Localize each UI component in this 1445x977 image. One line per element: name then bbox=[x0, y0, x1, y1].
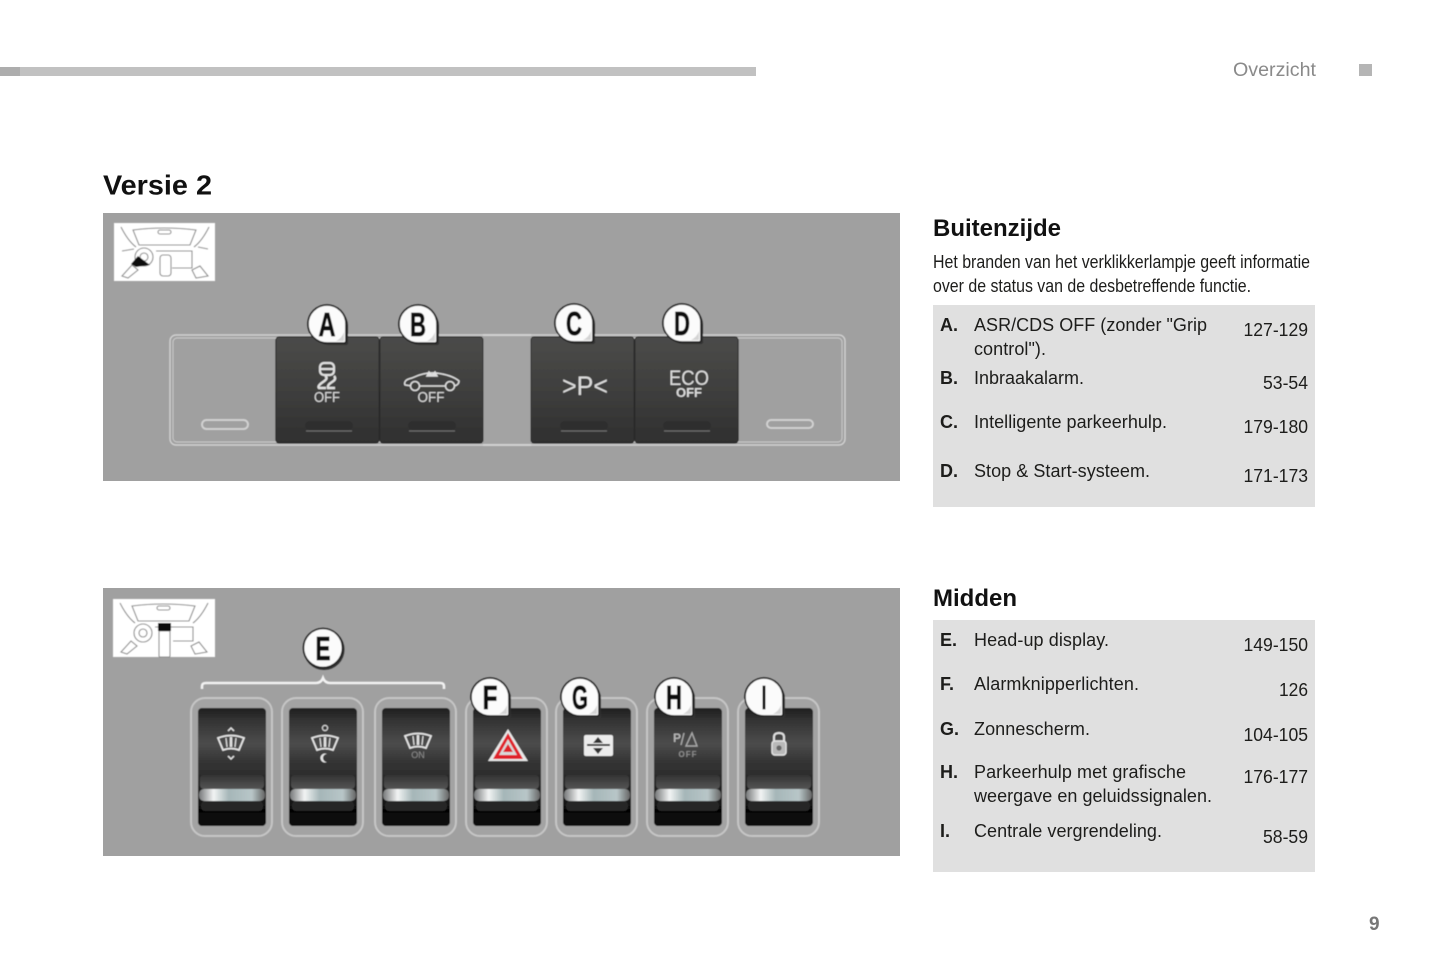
callout D: D bbox=[674, 305, 690, 342]
row G bbox=[940, 719, 1308, 745]
bracket bbox=[202, 678, 444, 689]
table: Midden bbox=[933, 620, 1315, 872]
icon: alarm car bbox=[405, 372, 459, 390]
switch H bbox=[647, 698, 728, 836]
switch frame bbox=[170, 335, 845, 445]
icon: park assist off: OFF bbox=[678, 750, 698, 759]
icon: sun blind bbox=[584, 735, 613, 756]
icon: dashboard locator A-D bbox=[114, 223, 215, 281]
row F: 126 bbox=[1279, 680, 1308, 700]
row H bbox=[940, 762, 1308, 806]
heading: Buitenzijde: Buitenzijde bbox=[933, 215, 1061, 242]
page number: 9 bbox=[1369, 914, 1380, 935]
button C: >P< bbox=[562, 371, 608, 401]
button B bbox=[380, 337, 483, 443]
row B: Inbraakalarm. bbox=[974, 368, 1084, 388]
row A: 127-129 bbox=[1244, 320, 1308, 340]
intro text: over de status van de desbetreffende functie. bbox=[933, 276, 1251, 296]
row H: Parkeerhulp met grafische bbox=[974, 762, 1186, 782]
row E bbox=[940, 630, 1308, 655]
button D: ECO bbox=[669, 367, 709, 390]
row A: ASR/CDS OFF (zonder "Grip bbox=[974, 315, 1207, 335]
callout G: G bbox=[572, 679, 588, 716]
row G: 104-105 bbox=[1244, 725, 1308, 745]
section name: Overzicht bbox=[1233, 59, 1317, 81]
heading: Midden: Midden bbox=[933, 585, 1017, 612]
callout C bbox=[555, 304, 595, 344]
callout B bbox=[399, 305, 439, 345]
row I bbox=[940, 821, 1308, 847]
switch E1 bbox=[191, 698, 272, 836]
row D: 171-173 bbox=[1244, 466, 1308, 486]
button B: OFF bbox=[418, 389, 444, 406]
icon: park assist off: P bbox=[673, 731, 681, 745]
row I: 58-59 bbox=[1263, 827, 1308, 847]
row E: 149-150 bbox=[1244, 635, 1308, 655]
row C: 179-180 bbox=[1244, 417, 1308, 437]
row F: Alarmknipperlichten. bbox=[974, 674, 1139, 694]
row D: D. bbox=[940, 461, 958, 481]
button D bbox=[635, 337, 738, 443]
row F bbox=[940, 674, 1308, 700]
callout G bbox=[561, 678, 601, 718]
icon: traction off bbox=[318, 363, 335, 388]
switch G bbox=[556, 698, 637, 836]
callout I bbox=[745, 678, 785, 718]
callout H: H bbox=[666, 679, 682, 716]
button A bbox=[276, 337, 379, 443]
intro text: Het branden van het verklikkerlampje geeft informatie bbox=[933, 252, 1310, 272]
callout D bbox=[663, 304, 703, 344]
icon: dashboard locator E-I bbox=[113, 599, 215, 657]
header bar bbox=[0, 67, 756, 76]
row A: control"). bbox=[974, 339, 1046, 359]
switch E3 bbox=[375, 698, 456, 836]
row H: 176-177 bbox=[1244, 767, 1308, 787]
callout F bbox=[471, 678, 511, 718]
icon: head-up height bbox=[218, 728, 244, 759]
callout A: A bbox=[318, 306, 336, 343]
callout I: I bbox=[762, 679, 766, 716]
icon: head-up brightness bbox=[312, 725, 338, 762]
icon: lock bbox=[772, 733, 786, 755]
row C: C. bbox=[940, 412, 958, 432]
row I: I. bbox=[940, 821, 950, 841]
table: Buitenzijde bbox=[933, 305, 1315, 507]
panel: centre switches photo bbox=[103, 588, 900, 856]
row A bbox=[940, 315, 1308, 359]
row I: Centrale vergrendeling. bbox=[974, 821, 1162, 841]
button A: OFF bbox=[314, 389, 340, 406]
callout A bbox=[308, 305, 348, 345]
icon: head-up on: ON bbox=[411, 750, 425, 760]
callout H bbox=[655, 678, 695, 718]
switch F bbox=[466, 698, 547, 836]
switch I bbox=[738, 698, 819, 836]
row E: E. bbox=[940, 630, 957, 650]
switch E2 bbox=[282, 698, 363, 836]
row G: G. bbox=[940, 719, 959, 739]
row B bbox=[940, 368, 1308, 393]
row D: Stop & Start-systeem. bbox=[974, 461, 1150, 481]
row B: 53-54 bbox=[1263, 373, 1308, 393]
page title: Versie 2 bbox=[103, 170, 212, 200]
button C bbox=[531, 337, 634, 443]
panel: exterior switches photo bbox=[103, 213, 900, 481]
callout F: F bbox=[482, 679, 498, 716]
row H: weergave en geluidssignalen. bbox=[973, 786, 1212, 806]
icon: park assist off bbox=[673, 731, 698, 759]
button D: OFF bbox=[676, 385, 702, 400]
row H: H. bbox=[940, 762, 958, 782]
callout B: B bbox=[410, 306, 426, 343]
callout E: E bbox=[316, 630, 330, 667]
callout C: C bbox=[566, 305, 582, 342]
row A: A. bbox=[940, 315, 958, 335]
intro text bbox=[933, 252, 1310, 296]
row B: B. bbox=[940, 368, 958, 388]
icon: hazard triangle bbox=[488, 729, 528, 761]
callout E bbox=[304, 628, 344, 670]
row E: Head-up display. bbox=[974, 630, 1109, 650]
header square marker bbox=[1359, 64, 1372, 76]
row G: Zonnescherm. bbox=[974, 719, 1090, 739]
row F: F. bbox=[940, 674, 954, 694]
row C: Intelligente parkeerhulp. bbox=[974, 412, 1167, 432]
row D bbox=[940, 461, 1308, 486]
row C bbox=[940, 412, 1308, 437]
